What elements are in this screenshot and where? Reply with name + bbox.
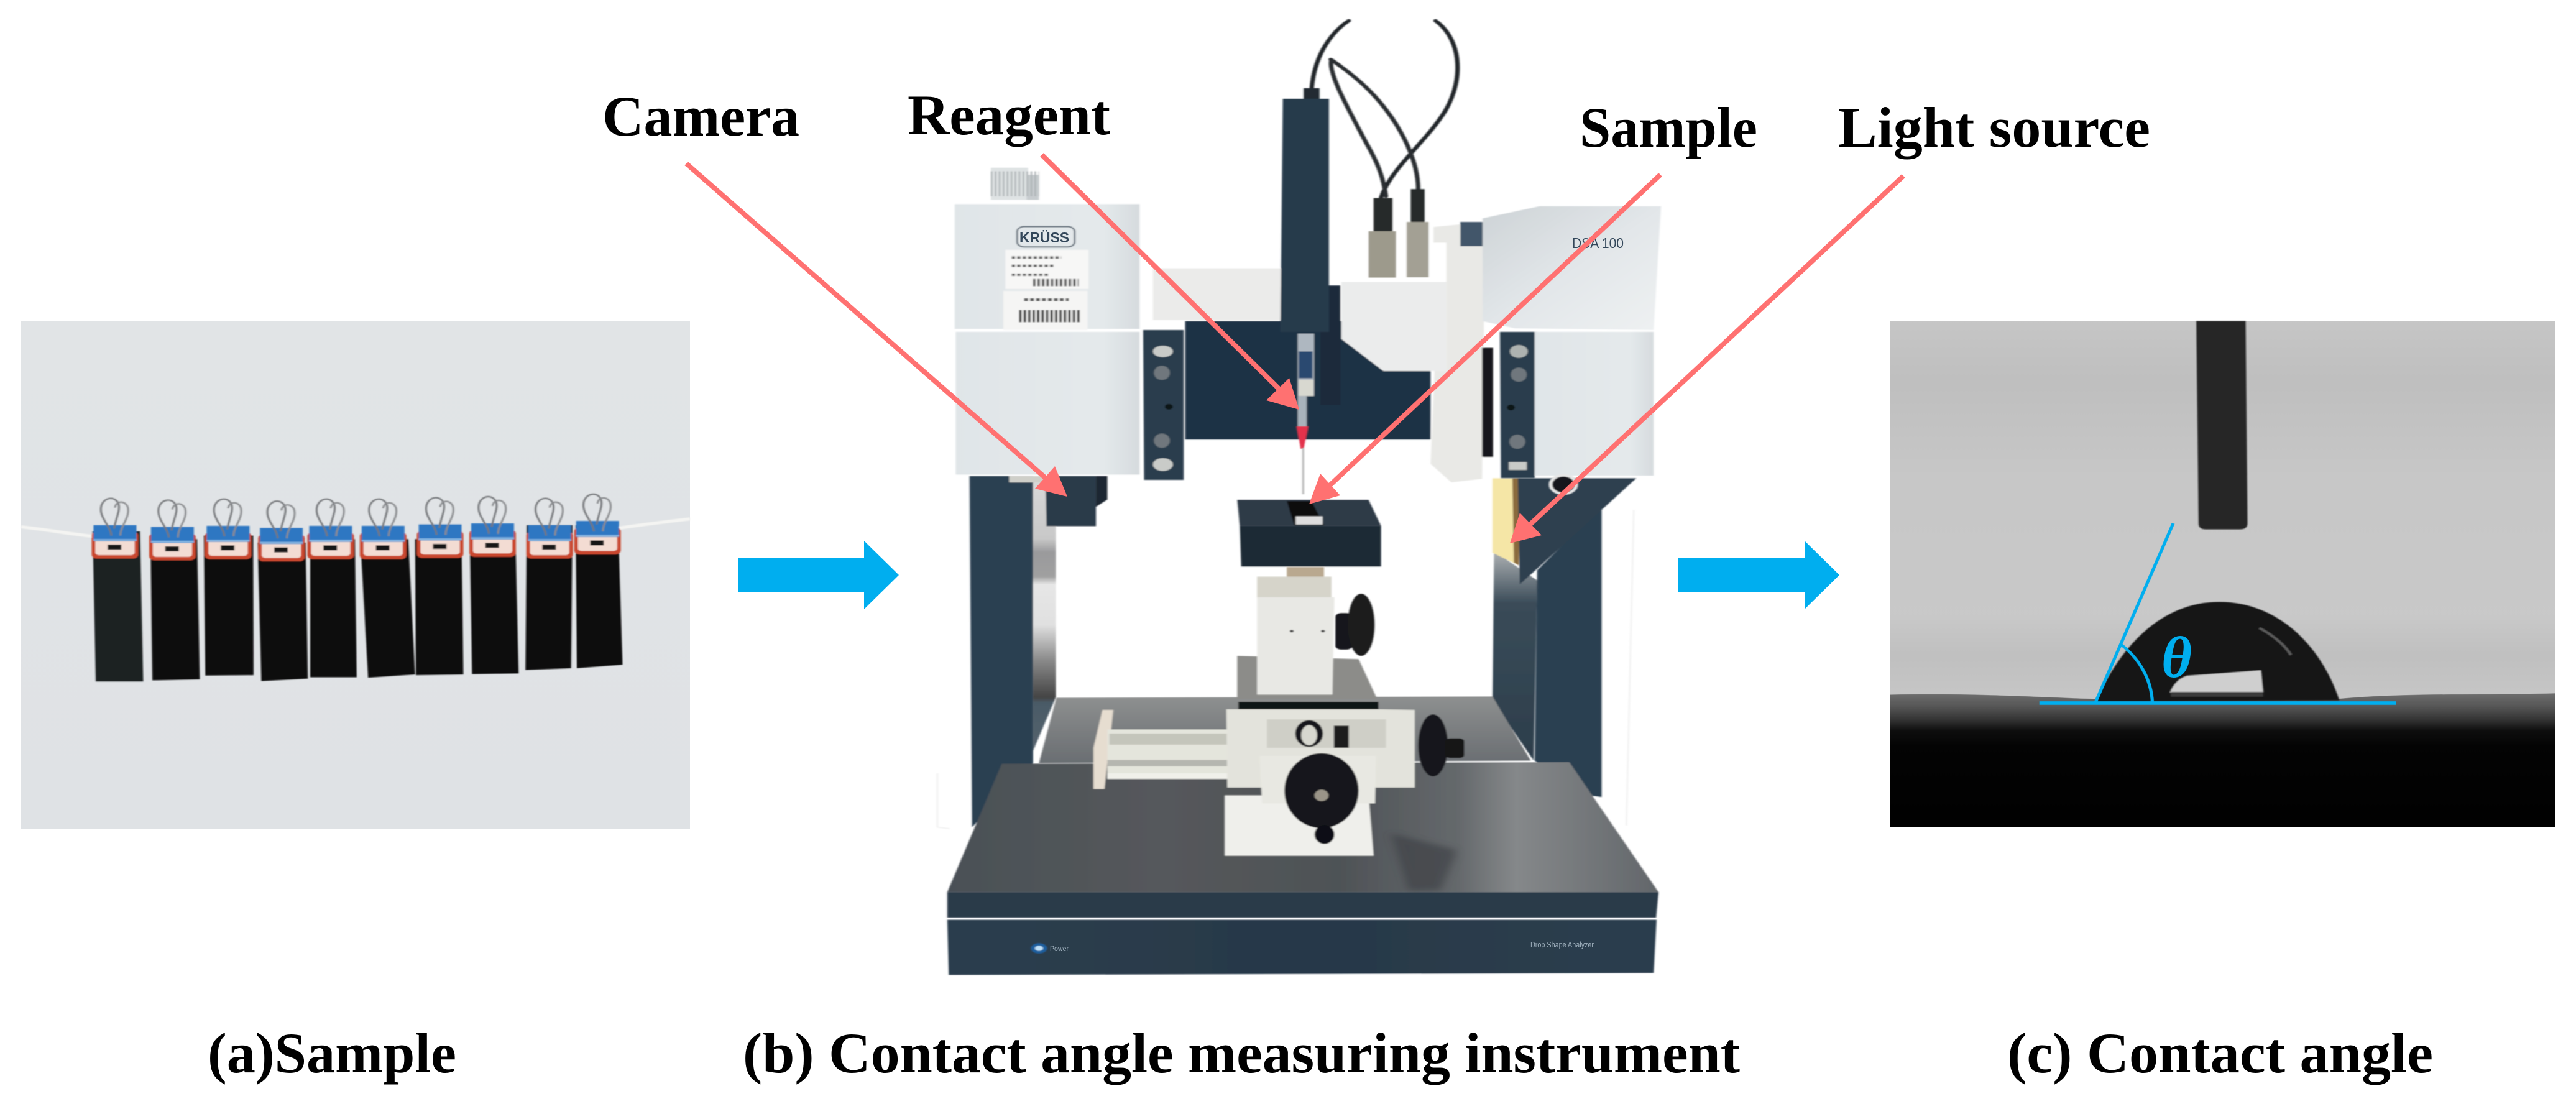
light housing angled support (1518, 478, 1636, 584)
callout arrow: camera (686, 163, 1067, 497)
right bracket (1430, 222, 1493, 482)
instrument lower section (937, 476, 1658, 975)
front text: Drop Shape Analyzer: Drop Shape Analyzer (1530, 940, 1594, 949)
panel: (a) sample photo (21, 321, 690, 829)
droplet (2096, 602, 2339, 701)
lift post (1287, 567, 1324, 589)
right inner panel (1493, 551, 1537, 760)
caption: (b) Contact angle measuring instrument: (b) Contact angle measuring instrument (743, 1021, 1740, 1085)
front slide knob (1284, 753, 1359, 844)
camera (1010, 476, 1107, 526)
left lower box (955, 332, 1139, 474)
instrument upper section (955, 21, 1661, 494)
left inner metal strip (1033, 482, 1056, 751)
base plate top (947, 762, 1658, 892)
label: Reagent: Reagent (908, 83, 1110, 147)
label: Sample: Sample (1580, 96, 1757, 159)
lift block (1257, 577, 1332, 598)
substrate (1890, 693, 2555, 827)
callout arrow: light source (1510, 176, 1903, 543)
base plate front lip (947, 892, 1658, 918)
caption: (a)Sample: (a)Sample (208, 1021, 456, 1085)
power button (1033, 944, 1045, 952)
back floor (1039, 696, 1530, 763)
rear white housing (1153, 269, 1283, 320)
metal mount (1341, 282, 1447, 371)
right column (1535, 507, 1601, 797)
photo background (21, 321, 690, 829)
grey background (1890, 321, 2555, 827)
dark crossbar (1185, 321, 1430, 439)
left column (970, 476, 1033, 827)
baseline (2040, 700, 2396, 706)
droplet highlight (2170, 670, 2263, 693)
KRUSS logo frame (1017, 226, 1075, 247)
model text: DSA 100: DSA 100 (1572, 235, 1624, 251)
base shadow (1391, 834, 1455, 891)
panel: (c) contact angle image (1890, 321, 2555, 827)
label: Light source: Light source (1838, 96, 2150, 159)
black plate (1238, 702, 1379, 713)
right bracket plate with screws (1500, 332, 1537, 478)
right lower box (1535, 332, 1654, 476)
angle arc (2120, 644, 2153, 703)
faint halo outline (937, 510, 1634, 829)
light housing (1493, 478, 1520, 564)
front text: Power: Power (1050, 944, 1069, 953)
cables (1312, 21, 1458, 198)
black sample strips (93, 525, 623, 681)
right top box (1483, 206, 1661, 330)
callout arrow: sample (1309, 175, 1660, 504)
sticker: text label (1005, 250, 1088, 289)
cable connectors (1369, 189, 1428, 278)
lift knob (1335, 594, 1374, 656)
sticker: barcode label (1003, 291, 1088, 330)
label: Camera: Camera (602, 85, 799, 148)
dosing unit (1281, 88, 1329, 332)
lower stage: base block (1225, 796, 1374, 856)
theta symbol: θ (2161, 625, 2192, 690)
binder clips (91, 494, 621, 561)
callout arrow: reagent (1042, 155, 1299, 410)
string (21, 519, 690, 536)
left top box (955, 204, 1139, 329)
needle (2196, 321, 2247, 530)
panel: (b) contact angle measuring instrument (937, 21, 1661, 975)
arrow: instrument to contact angle (1678, 541, 1839, 609)
left knob (991, 168, 1039, 200)
brand text: KRUSS: KRÜSS (1019, 229, 1069, 246)
linear rail left (1093, 710, 1229, 789)
left bracket plate with screws (1143, 330, 1184, 480)
samples on string (21, 494, 690, 681)
housing hole (1550, 476, 1576, 494)
right slide knob (1418, 714, 1465, 776)
tangent line (2095, 523, 2173, 703)
cross slide (1226, 709, 1415, 803)
lift plate (1237, 656, 1377, 699)
arrow: sample to instrument (738, 541, 899, 609)
caption: (c) Contact angle: (c) Contact angle (2007, 1021, 2433, 1085)
base front panel (947, 920, 1657, 975)
sample stage plate (1237, 500, 1381, 566)
syringe (1297, 285, 1340, 494)
